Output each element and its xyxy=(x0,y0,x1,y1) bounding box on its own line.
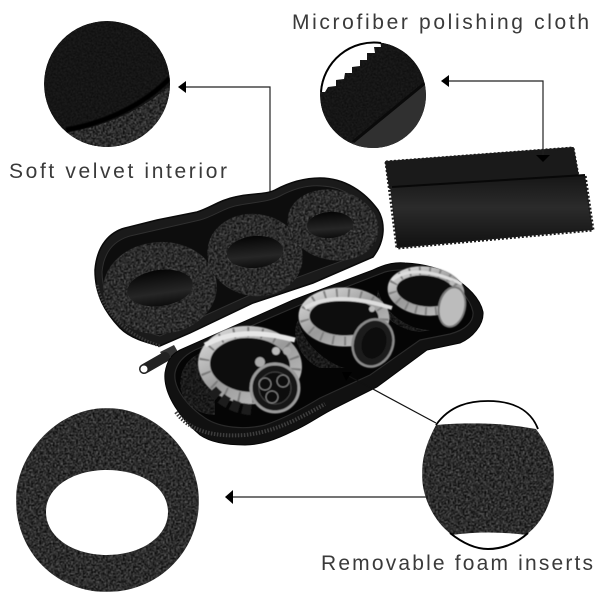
arrow: cloth callout xyxy=(441,75,550,162)
foam visible around watch bases xyxy=(180,290,430,415)
zipper: tray edge xyxy=(176,404,325,435)
inset: velvet detail circle xyxy=(44,21,170,147)
foam insert: lid middle xyxy=(201,206,309,304)
zipper: lid edge xyxy=(97,285,160,346)
case: lower tray with watches xyxy=(165,263,483,445)
inset: foam detail circle xyxy=(422,401,554,549)
inset: polishing cloth detail circle xyxy=(320,42,426,148)
label: Microfiber polishing cloth: Microfiber polishing cloth xyxy=(292,11,589,34)
foam insert: lid left xyxy=(100,238,220,338)
zipper pull xyxy=(140,345,178,372)
arrow: foam in tray callout xyxy=(342,372,436,423)
foam insert: lid right xyxy=(281,181,385,269)
label: Removable foam inserts: Removable foam inserts xyxy=(321,552,593,575)
watch 1: chronograph xyxy=(202,329,299,412)
watch 2: diver xyxy=(303,292,400,372)
watch 3: silver dial xyxy=(390,268,469,329)
foam ring: removable insert xyxy=(16,408,199,592)
case: open lid with foam inserts xyxy=(95,178,385,346)
label: Soft velvet interior: Soft velvet interior xyxy=(9,160,227,183)
arrow: foam ring callout xyxy=(225,490,430,504)
cloth: folded microfiber cloth xyxy=(386,148,593,248)
arrow: velvet callout xyxy=(178,81,276,212)
